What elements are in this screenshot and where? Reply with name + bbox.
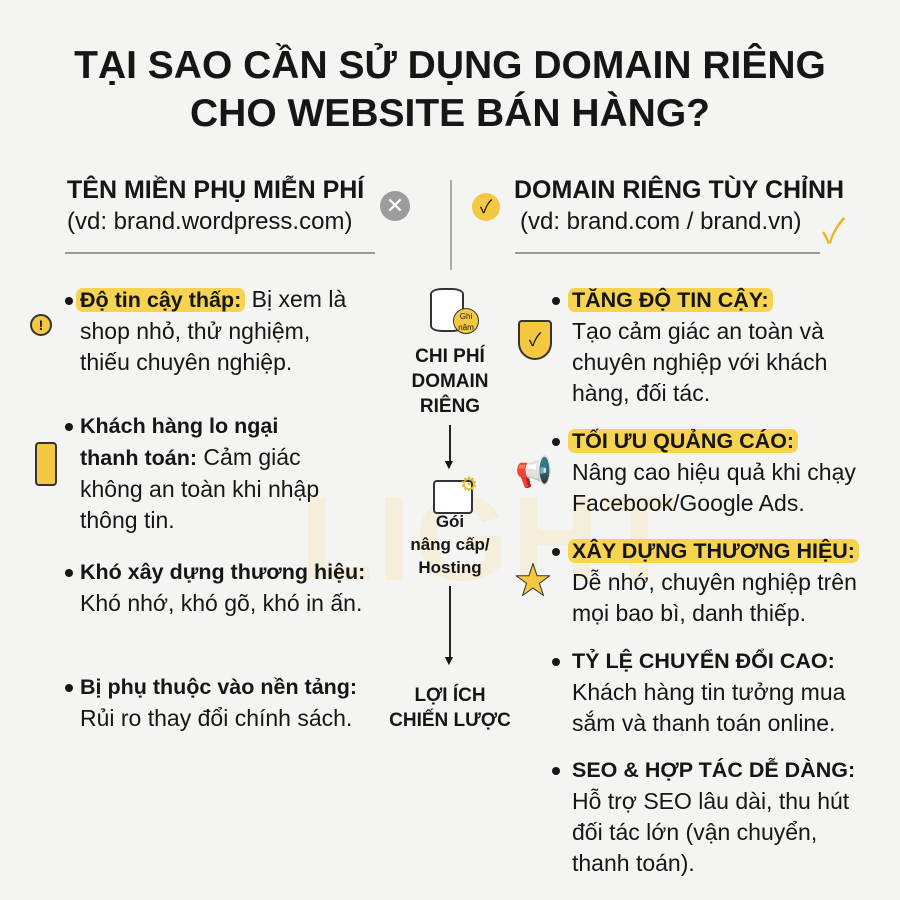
icon: check sun — [472, 193, 500, 221]
right column — [515, 288, 859, 876]
title: TẠI SAO CẦN SỬ DỤNG DOMAIN RIÊNG — [74, 44, 826, 87]
right item 5: Hỗ trợ SEO lâu dài, thu hút — [572, 788, 849, 814]
center column: ▼ — [442, 456, 456, 472]
left item 2 — [35, 414, 319, 533]
center text 1 — [411, 344, 489, 417]
left column — [30, 286, 365, 731]
right item 2: TỐI ƯU QUẢNG CÁO: — [572, 429, 794, 453]
right item 3: XÂY DỰNG THƯƠNG HIỆU: — [572, 539, 855, 563]
center text 3 — [389, 684, 511, 731]
right item 4: Khách hàng tin tưởng mua — [572, 679, 845, 705]
arrow 1 — [449, 425, 451, 465]
divider — [450, 180, 452, 270]
left item 1: thiếu chuyên nghiệp. — [80, 349, 292, 375]
left item 1: ! — [39, 317, 43, 333]
title — [74, 43, 826, 135]
right item 2: Nâng cao hiệu quả khi chạy — [572, 459, 856, 485]
center text 1: CHI PHÍ — [415, 346, 485, 367]
left item 1: shop nhỏ, thử nghiệm, — [80, 318, 310, 344]
center text 3: CHIẾN LƯỢC — [389, 710, 511, 731]
left item 3: Khó xây dựng thương hiệu: — [80, 560, 365, 584]
right item 1: chuyên nghiệp với khách — [572, 349, 827, 375]
icon: database — [430, 288, 464, 332]
left item 4 — [65, 675, 357, 731]
right item 2: 📢 — [515, 456, 552, 489]
right item 1: ✓ — [529, 330, 541, 350]
icon: x — [380, 191, 410, 221]
center column — [389, 288, 511, 731]
right item 1: Tạo cảm giác an toàn và — [572, 318, 824, 344]
center text 2: Gói — [436, 512, 464, 531]
right item 2 — [515, 428, 856, 516]
icon: check sun: ✓ — [480, 197, 492, 217]
right item 1: hàng, đối tác. — [572, 380, 710, 406]
center text 1: RIÊNG — [420, 396, 480, 417]
right item 1: TĂNG ĐỘ TIN CẬY: — [572, 288, 769, 312]
right item 5: SEO & HỢP TÁC DỄ DÀNG: — [572, 758, 855, 782]
right item 5 — [552, 758, 855, 876]
right item 3 — [515, 538, 859, 626]
left item 2: không an toàn khi nhập — [80, 476, 319, 502]
left item 2: Khách hàng lo ngại — [80, 414, 278, 438]
header: left: TÊN MIỀN PHỤ MIỄN PHÍ — [67, 176, 364, 204]
right item 1 — [518, 288, 827, 406]
left item 2: thông tin. — [80, 507, 175, 533]
left item 1 — [30, 286, 346, 375]
header: left — [65, 176, 410, 254]
left item 4: Bị phụ thuộc vào nền tảng: — [80, 675, 357, 699]
icon: big check: ✓ — [822, 213, 845, 251]
header: right: DOMAIN RIÊNG TÙY CHỈNH — [514, 176, 844, 204]
center text 2: Hosting — [418, 558, 482, 577]
right item 4: TỶ LỆ CHUYỂN ĐỔI CAO: — [572, 649, 835, 673]
watermark: LIGHT — [300, 472, 680, 606]
left item 4: Rủi ro thay đổi chính sách. — [80, 705, 352, 731]
right item 5: thanh toán). — [572, 850, 695, 876]
header: right — [472, 176, 846, 254]
icon: x: ✕ — [386, 193, 404, 218]
right item 3: ★ — [515, 560, 551, 601]
title: CHO WEBSITE BÁN HÀNG? — [190, 92, 710, 135]
center text 2: nâng cấp/ — [410, 535, 490, 554]
icon: hosting — [433, 480, 473, 514]
header: left: (vd: brand.wordpress.com) — [67, 208, 352, 235]
left item 1: Độ tin cậy thấp: Bị xem là — [80, 286, 346, 312]
right item 4 — [552, 648, 846, 736]
right item 5: đối tác lớn (vận chuyển, — [572, 819, 817, 845]
center text 1: DOMAIN — [411, 371, 489, 392]
right item 3: Dễ nhớ, chuyên nghiệp trên — [572, 569, 857, 595]
center column: năm — [458, 323, 474, 332]
center column: Ghi — [460, 312, 472, 321]
header: right: (vd: brand.com / brand.vn) — [520, 208, 801, 235]
center text 2 — [410, 512, 490, 577]
center column: ▼ — [442, 652, 456, 668]
right item 4: sắm và thanh toán online. — [572, 710, 835, 736]
center column: ⚙ — [460, 474, 478, 496]
left item 3 — [65, 560, 365, 616]
left item 3: Khó nhớ, khó gõ, khó in ấn. — [80, 590, 362, 616]
arrow 2 — [449, 586, 451, 661]
right item 2: Facebook/Google Ads. — [572, 490, 805, 516]
right item 3: mọi bao bì, danh thiếp. — [572, 600, 806, 626]
left item 2: thanh toán: Cảm giác — [80, 444, 301, 470]
center text 3: LỢI ÍCH — [414, 685, 486, 706]
